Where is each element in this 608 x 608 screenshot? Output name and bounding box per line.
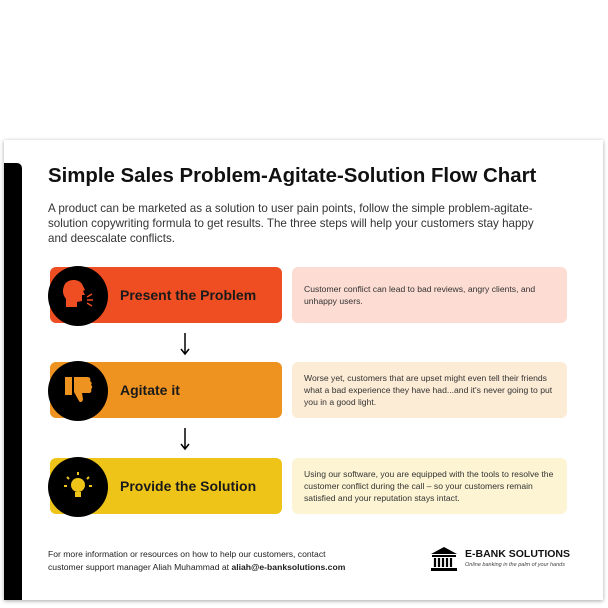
step 2 description: Worse yet, customers that are upset might even tell their friends what a bad experience they have had...and it's never going to put you in a good light. xyxy=(304,373,552,407)
step 2 description xyxy=(292,362,567,418)
logo: E-BANK SOLUTIONS xyxy=(465,548,570,560)
icon: lightbulb xyxy=(48,457,108,517)
footer contact: customer support manager Aliah Muhammad at aliah@e-banksolutions.com xyxy=(48,562,345,572)
step 1 description xyxy=(292,267,567,323)
step 1 description: Customer conflict can lead to bad reviews, angry clients, and unhappy users. xyxy=(304,284,535,306)
step 3 banner: Provide the Solution xyxy=(120,478,256,494)
icon: speaking head xyxy=(48,266,108,326)
arrow 1 xyxy=(180,333,190,356)
card xyxy=(4,140,603,600)
icon: thumbs down xyxy=(48,361,108,421)
black side bar xyxy=(4,163,22,600)
icon: bank xyxy=(431,547,457,571)
intro text: A product can be marketed as a solution to user pain points, follow the simple problem-agitate-solution copywriting formula to get results. The three steps will help your customers stay happy and deescalate conflicts. xyxy=(48,202,534,245)
step 3 description: Using our software, you are equipped with the tools to resolve the customer conflict during the call – so your customers remain satisfied and your reputation stays intact. xyxy=(304,469,553,503)
step 2 banner: Agitate it xyxy=(120,382,180,398)
step 1 banner xyxy=(50,267,282,323)
step 2 banner xyxy=(50,362,282,418)
logo xyxy=(431,547,570,571)
arrow 2 xyxy=(180,428,190,450)
step 3 banner xyxy=(50,458,282,514)
logo: Online banking in the palm of your hands xyxy=(465,562,565,568)
step 1 banner: Present the Problem xyxy=(120,287,256,303)
step 3 description xyxy=(292,458,567,514)
footer contact: For more information or resources on how to help our customers, contact xyxy=(48,549,326,559)
title: Simple Sales Problem-Agitate-Solution Flow Chart xyxy=(48,165,536,187)
footer contact xyxy=(48,549,345,572)
